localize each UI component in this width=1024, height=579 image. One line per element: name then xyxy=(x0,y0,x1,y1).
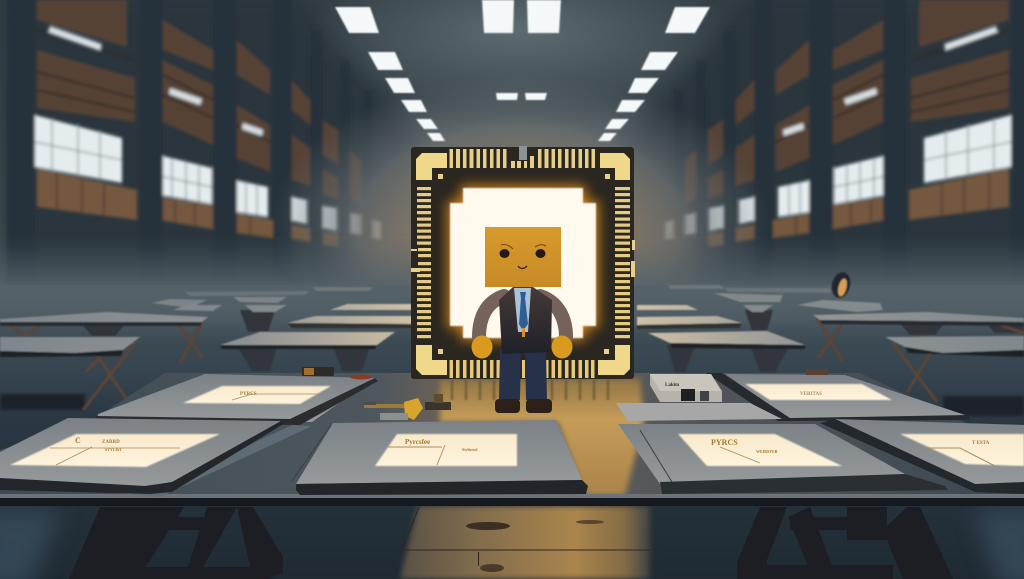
front left paper stack: STYLIST xyxy=(105,447,122,452)
arms xyxy=(479,296,566,337)
top pins xyxy=(450,149,595,168)
white boxed book: Lakim xyxy=(665,383,680,388)
front right paper stack: WEIRSTER xyxy=(756,449,778,454)
panel text: VERITAS xyxy=(800,392,822,397)
front center paper stack xyxy=(292,420,588,495)
columns xyxy=(7,0,372,290)
near right upper paper xyxy=(706,373,970,421)
gold reflection under chip xyxy=(440,378,644,496)
lit panel xyxy=(183,386,331,404)
lit panel xyxy=(900,434,1024,466)
floor blue sheen xyxy=(0,510,1024,579)
stray object on distant table xyxy=(829,270,853,300)
face xyxy=(500,244,546,268)
back wall haze xyxy=(270,75,770,375)
panel text: C xyxy=(75,436,81,445)
background tables xyxy=(0,285,1024,410)
right pins xyxy=(615,187,630,338)
lit panel xyxy=(10,434,220,467)
right wall (mirrored) xyxy=(576,0,1024,300)
table undersides and aprons xyxy=(80,310,1024,372)
main table legs, right xyxy=(737,507,953,579)
front left paper stack xyxy=(0,418,312,497)
shirt xyxy=(514,288,531,332)
ceiling light bloom xyxy=(310,0,730,110)
corner pads xyxy=(416,153,630,375)
floor xyxy=(0,285,1024,579)
shoes xyxy=(495,399,552,413)
tools: tape measure and key xyxy=(364,394,451,420)
main table legs, left xyxy=(69,507,283,579)
floor light reflection xyxy=(400,506,650,579)
small items at back of table xyxy=(302,367,828,380)
suit jacket xyxy=(499,287,552,354)
wall base xyxy=(0,0,470,300)
left tables xyxy=(0,337,140,353)
right tables xyxy=(648,331,805,345)
glow on inner board xyxy=(450,188,596,338)
hands xyxy=(472,336,572,358)
panel text: T ESTA xyxy=(972,441,990,446)
chip reflection stripes xyxy=(452,380,608,400)
lit panel xyxy=(678,434,842,466)
left wall with shelves and windows xyxy=(0,0,470,300)
legs xyxy=(499,350,547,400)
small square pads xyxy=(438,174,610,354)
left pins xyxy=(417,187,431,338)
top clip xyxy=(519,146,527,160)
upper left paper stack xyxy=(95,374,378,425)
far tables xyxy=(185,285,832,296)
processor chip xyxy=(411,146,635,379)
glowing white window xyxy=(450,188,596,338)
main table top xyxy=(0,373,1024,497)
square head xyxy=(485,227,561,287)
warm haze around chip xyxy=(332,115,712,415)
table front edge xyxy=(0,494,1024,506)
chip board xyxy=(411,147,634,379)
white boxed book xyxy=(650,374,722,402)
lower brick rows xyxy=(37,168,338,247)
tie clip xyxy=(522,328,525,337)
lit panel xyxy=(375,434,517,466)
tie xyxy=(519,292,528,331)
panel text: Pyrcsfee xyxy=(405,438,430,446)
bottom pins xyxy=(450,360,594,378)
front far-right paper stack xyxy=(820,419,1024,494)
fog band xyxy=(0,240,1024,340)
ceiling and back wall xyxy=(0,0,1024,300)
windows xyxy=(35,115,381,240)
front right paper stack xyxy=(618,424,948,494)
floor shadows xyxy=(0,394,1024,416)
front center paper stack: Stylistrol xyxy=(462,447,478,452)
character xyxy=(472,227,572,413)
wall lamps xyxy=(48,26,263,136)
lit panel xyxy=(745,384,892,400)
table legs xyxy=(5,318,1024,410)
thin loose sheet xyxy=(616,403,782,421)
ceiling lights xyxy=(335,0,710,141)
panel text: PYRCS xyxy=(711,438,738,447)
upper brick rows xyxy=(37,0,361,205)
panel text: PYRCS xyxy=(240,392,257,397)
front left paper stack: ZARRD xyxy=(102,440,120,445)
side tabs and notches xyxy=(411,240,635,277)
